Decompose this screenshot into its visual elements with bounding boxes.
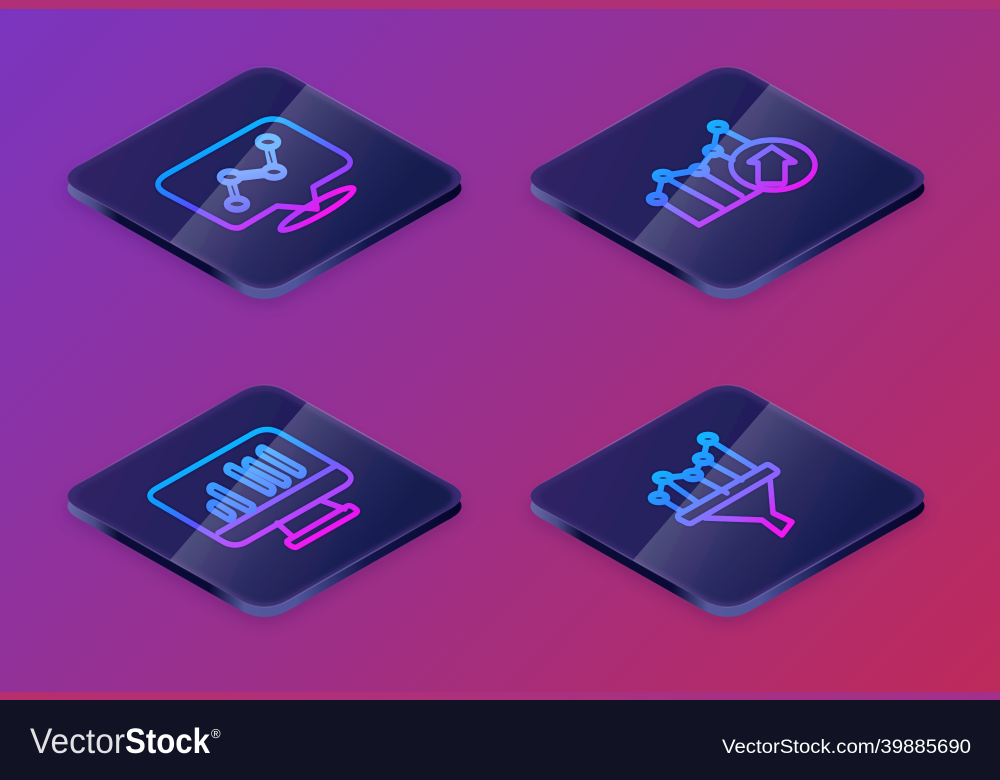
icon: funnel with network nodes — [651, 435, 792, 535]
image id url: VectorStock.com/39885690 — [722, 737, 971, 758]
icon: computer monitor with bars — [150, 430, 357, 547]
tile: monitor with bar chart — [68, 378, 480, 620]
logo: VectorStock: ® — [211, 726, 221, 741]
icon: speech bubble with network nodes — [158, 119, 357, 235]
logo: VectorStock: Vector — [30, 722, 125, 761]
top strip — [0, 0, 1000, 9]
tile: growth crown with upload arrow — [530, 60, 943, 302]
logo: VectorStock — [30, 722, 221, 761]
bottom strip — [0, 692, 1000, 700]
tile: data funnel — [530, 378, 943, 620]
logo: VectorStock: Stock — [125, 722, 210, 761]
icon: network bars with arrow circle — [649, 123, 815, 225]
tile: network chat bubble — [68, 60, 480, 302]
footer bar — [0, 700, 1000, 780]
